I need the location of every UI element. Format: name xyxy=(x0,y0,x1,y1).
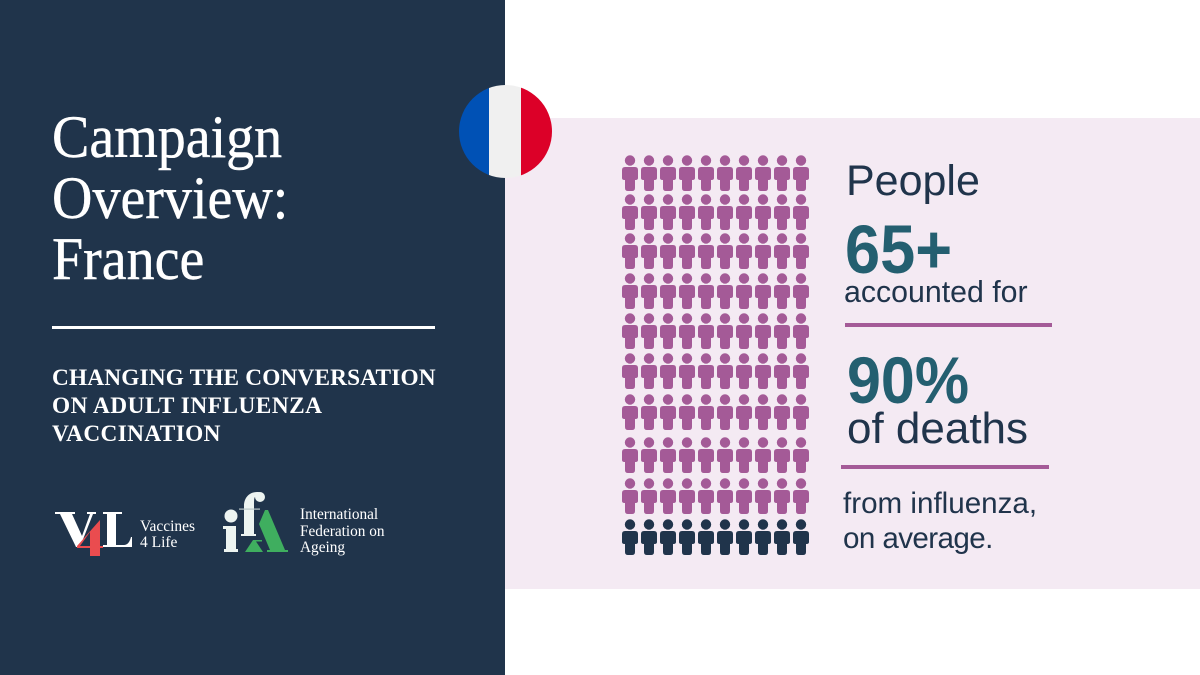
stat: 65+: 65+ xyxy=(845,211,952,288)
text: from influenza, on average.: from influenza, xyxy=(843,487,1037,520)
logo: International Federation on Ageing: Federation on xyxy=(300,522,385,540)
subtitle xyxy=(52,365,436,447)
panel: left navy sidebar xyxy=(0,0,505,675)
panel: right pink statistic panel xyxy=(505,118,1200,589)
title xyxy=(52,105,288,293)
title: Campaign xyxy=(52,105,282,171)
subtitle: CHANGING THE CONVERSATION xyxy=(52,365,436,391)
divider: second purple rule xyxy=(841,465,1049,469)
logo: International Federation on Ageing xyxy=(223,492,385,556)
logo: Vaccines 4 Life: Vaccines xyxy=(140,518,195,535)
divider: first purple rule xyxy=(845,323,1052,327)
logo: International Federation on Ageing: Ageing xyxy=(300,539,345,556)
text: from influenza, on average. xyxy=(843,487,1037,555)
title: Overview: xyxy=(52,166,288,232)
icon: French flag circle xyxy=(459,85,552,178)
logo: International Federation on Ageing: International xyxy=(300,506,378,523)
text: of deaths: of deaths xyxy=(847,404,1028,453)
chart: pictogram of 100 people, 90 purple and 10 navy xyxy=(622,155,809,555)
stat: 90%: 90% xyxy=(847,343,969,417)
text: from influenza, on average.: on average. xyxy=(843,522,993,555)
text: People: People xyxy=(846,157,980,205)
logo: Vaccines 4 Life: 4 Life xyxy=(140,534,177,551)
subtitle: ON ADULT INFLUENZA xyxy=(52,393,323,419)
divider rule xyxy=(52,326,435,329)
logo: Vaccines 4 Life xyxy=(55,512,195,556)
title: France xyxy=(52,227,204,293)
subtitle: VACCINATION xyxy=(52,421,221,447)
text: accounted for: accounted for xyxy=(844,276,1028,309)
